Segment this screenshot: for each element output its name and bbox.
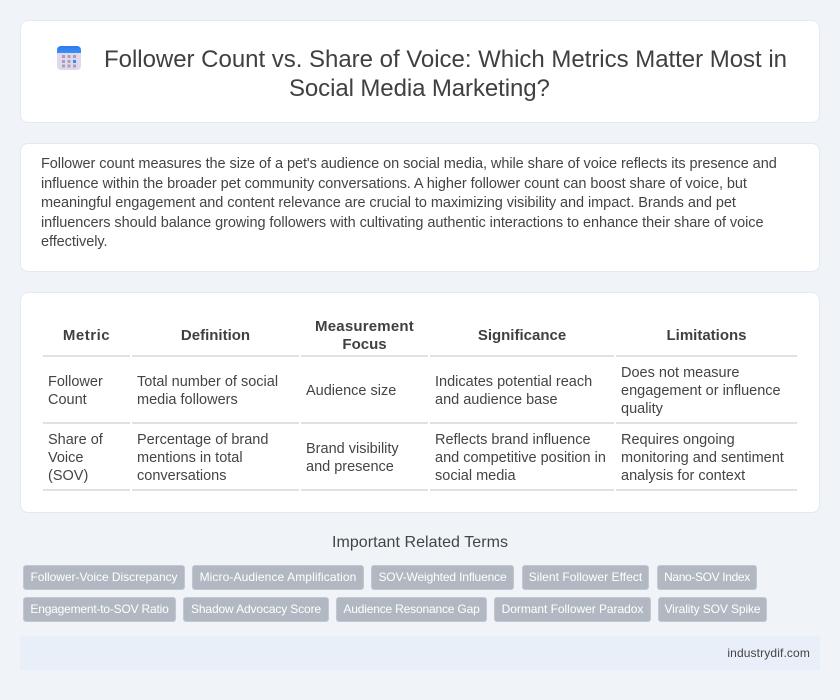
table row: Share of Voice: Brand visibility: [306, 441, 399, 457]
table header: Metric: [63, 327, 110, 344]
table row: Follower Count: Does not measure: [621, 365, 739, 381]
title: Social Media Marketing?: [289, 75, 550, 102]
tag group: related terms: Nano-SOV Index: [664, 570, 750, 584]
table row: Follower Count: quality: [621, 401, 663, 417]
panel: summary paragraph: [20, 143, 820, 272]
table row: Follower Count: Indicates potential reach: [435, 374, 592, 390]
text block: summary: influence within the broader pet community conversations. A higher follower count can boost share of voice, but: [41, 176, 747, 192]
text block: summary: Follower count measures the size of a pet's audience on social media, while share of voice reflects its presence and: [41, 156, 777, 172]
table row: Share of Voice: social media: [435, 468, 516, 484]
table row: Share of Voice: monitoring and sentiment: [621, 450, 784, 466]
tag group: related terms: Micro-Audience Amplification: [200, 570, 356, 584]
panel: comparison table: [20, 292, 820, 513]
table row: Share of Voice: conversations: [137, 468, 226, 484]
table row: Follower Count: Count: [48, 392, 87, 408]
table row: Follower Count: [48, 365, 781, 417]
text block: summary: meaningful engagement and content relevance are crucial to maximizing visibility and impact. Brands and pet: [41, 195, 736, 211]
icon: calendar: [57, 46, 81, 70]
footer text: industrydif.com: [727, 646, 810, 660]
text block: summary: effectively.: [41, 234, 107, 250]
panel: title card: [20, 20, 820, 123]
title: Follower Count vs. Share of Voice: Which Metrics Matter Most in: [104, 46, 787, 73]
title: [104, 46, 787, 102]
table row: Share of Voice: (SOV): [48, 468, 88, 484]
table row: Share of Voice: Reflects brand influence: [435, 432, 591, 448]
footer bar: [20, 636, 820, 670]
table header: Limitations: [666, 327, 746, 344]
table: metrics comparison: [43, 318, 797, 491]
table row: Follower Count: Follower: [48, 374, 103, 390]
table row: Share of Voice: Voice: [48, 450, 83, 466]
heading: related terms: Important Related Terms: [332, 534, 508, 551]
table header: Focus: [342, 336, 387, 353]
text block: summary: influencers should balance growing followers with cultivating authentic interactions to enhance their share of voice: [41, 214, 764, 230]
table row: Follower Count: and audience base: [435, 392, 558, 408]
table row: Share of Voice: Share of: [48, 432, 103, 448]
tag group: related terms: SOV-Weighted Influence: [378, 570, 507, 584]
table row: Share of Voice: [48, 432, 784, 484]
tag group: related terms: Audience Resonance Gap: [343, 602, 480, 616]
tag group: related terms: Engagement-to-SOV Ratio: [30, 602, 169, 616]
table row: Follower Count: engagement or influence: [621, 383, 781, 399]
text block: summary: [41, 156, 777, 250]
table row: Follower Count: media followers: [137, 392, 238, 408]
tag group: related terms: Virality SOV Spike: [664, 602, 761, 616]
tag group: related terms: Dormant Follower Paradox: [502, 602, 643, 616]
table row: Share of Voice: Requires ongoing: [621, 432, 735, 448]
tag group: related terms: Follower-Voice Discrepancy: [30, 570, 178, 584]
table header: Definition: [181, 327, 250, 344]
table row: Share of Voice: analysis for context: [621, 468, 745, 484]
table header: [63, 318, 746, 353]
table row: Share of Voice: and presence: [306, 459, 394, 475]
table row: Follower Count: Total number of social: [137, 374, 278, 390]
tag group: related terms: Shadow Advocacy Score: [191, 602, 321, 616]
table row: Follower Count: Audience size: [306, 383, 396, 399]
table row: Share of Voice: and competitive position in: [435, 450, 606, 466]
table header: Measurement: [315, 318, 414, 335]
table row: Share of Voice: Percentage of brand: [137, 432, 268, 448]
tag group: related terms: [23, 565, 767, 622]
table header: Significance: [478, 327, 566, 344]
table row: Share of Voice: mentions in total: [137, 450, 243, 466]
tag group: related terms: Silent Follower Effect: [529, 570, 642, 584]
